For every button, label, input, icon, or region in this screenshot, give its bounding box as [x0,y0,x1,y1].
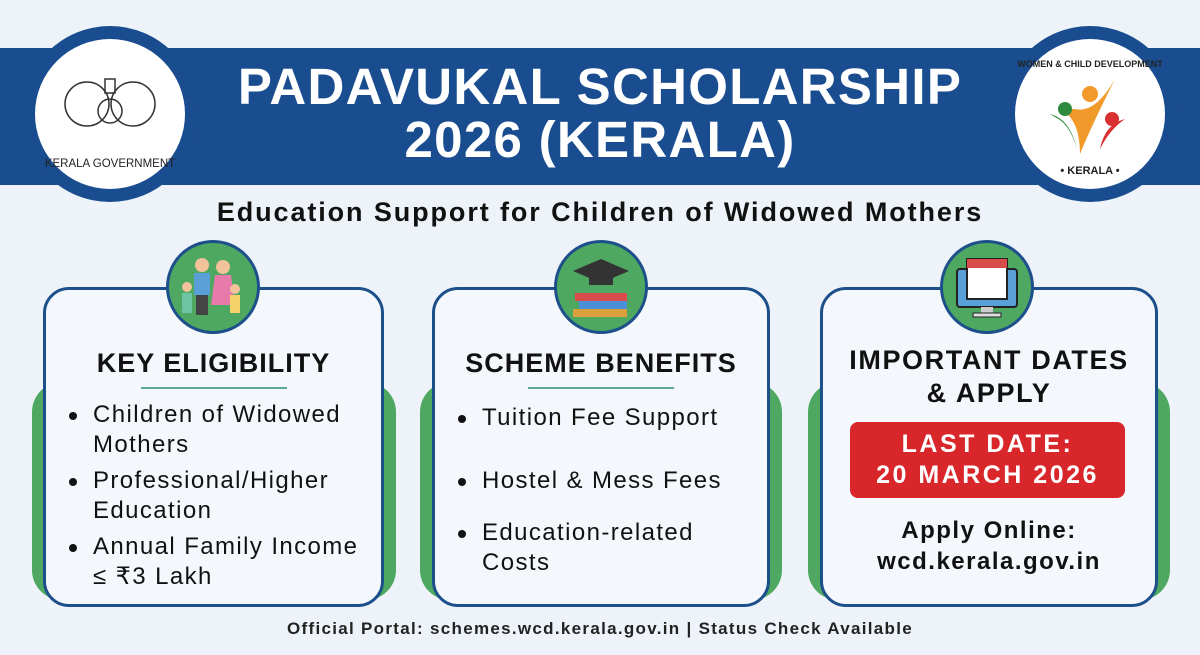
title [238,58,962,168]
logo: women & child development [1002,26,1178,202]
apply online [877,517,1101,575]
footer: Official Portal: schemes.wcd.kerala.gov.in | Status Check Available [287,619,913,638]
icon: calendar [940,240,1034,334]
callout: last date [850,422,1125,498]
bullet list: Tuition Fee Support [482,404,718,431]
bullet list: Mothers [93,431,190,458]
panel: benefits [420,240,782,607]
heading: KEY ELIGIBILITY [97,348,330,378]
title: PADAVUKAL SCHOLARSHIP [238,58,962,115]
title: 2026 (KERALA) [404,111,795,168]
heading: & APPLY [927,378,1051,408]
callout: last date: 20 MARCH 2026 [876,461,1099,489]
bullet list [69,401,358,590]
panel: dates [808,240,1170,607]
bullet list [458,404,722,576]
apply online: wcd.kerala.gov.in [877,548,1101,575]
bullet list: Professional/Higher [93,467,329,494]
logo: kerala government: KERALA GOVERNMENT [45,158,175,170]
icon: graduation books [554,240,648,334]
bullet list: Education-related [482,519,694,546]
logo: women & child development: WOMEN & CHILD DEVELOPMENT [1017,59,1163,69]
bullet list: Hostel & Mess Fees [482,467,722,494]
panel: eligibility [32,240,396,607]
bullet list: Annual Family Income [93,533,358,560]
bullet list: Children of Widowed [93,401,341,428]
subtitle: Education Support for Children of Widowed Mothers [217,197,983,227]
heading [849,345,1129,408]
bullet list: Costs [482,549,550,576]
logo: women & child development: • KERALA • [1060,165,1120,177]
apply online: Apply Online: [901,517,1077,544]
logo: kerala government [22,26,198,202]
banner [0,48,1200,185]
bullet list: ≤ ₹3 Lakh [93,563,213,590]
heading: SCHEME BENEFITS [465,348,737,378]
heading: IMPORTANT DATES [849,345,1129,375]
callout: last date: LAST DATE: [902,430,1073,458]
bullet list: Education [93,497,212,524]
icon: family [166,240,260,334]
